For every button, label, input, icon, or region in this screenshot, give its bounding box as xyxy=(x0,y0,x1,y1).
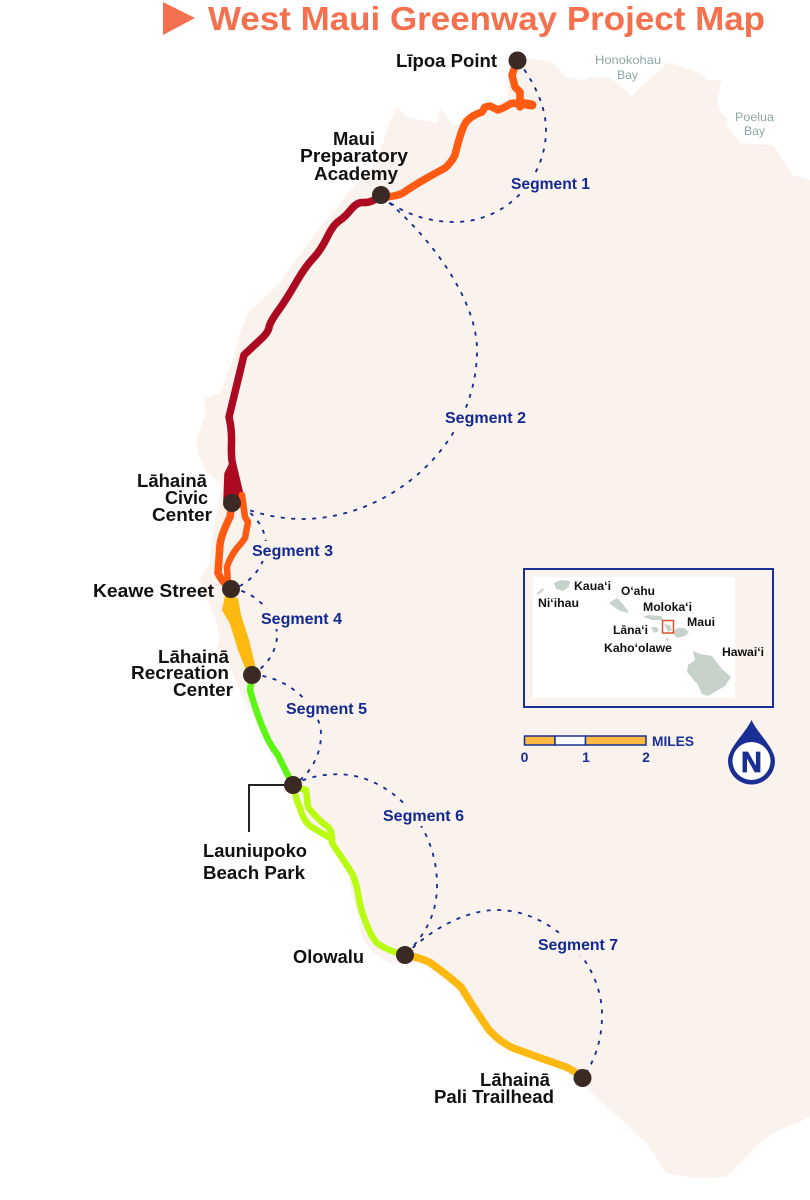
inset: Hawaiian Islands locator xyxy=(524,569,773,707)
place labels: Lāhainā xyxy=(480,1069,551,1090)
island labels: Lāna‘i xyxy=(613,623,648,637)
place labels: Beach Park xyxy=(203,862,306,883)
trail: segment 3 xyxy=(218,495,248,588)
bay labels: Honokohau xyxy=(595,53,661,67)
place labels: Keawe Street xyxy=(93,580,214,601)
scale bar: MILES xyxy=(652,734,694,749)
trail: segment 4 xyxy=(222,596,257,673)
place labels: Center xyxy=(173,679,233,700)
scale bar: 2 xyxy=(642,749,650,765)
locator box xyxy=(662,620,674,633)
island labels xyxy=(538,579,764,659)
island labels: Maui xyxy=(687,615,715,629)
scale bar: 0 xyxy=(521,749,529,765)
bay labels xyxy=(595,53,774,138)
icon: north arrow: N xyxy=(741,747,762,779)
segment labels xyxy=(249,174,621,955)
island labels: Kaua‘i xyxy=(574,579,611,593)
trail: segment 5 xyxy=(250,675,293,785)
title text: West Maui Greenway Project Map xyxy=(208,0,765,37)
segment brackets: dashed arcs xyxy=(231,61,602,1078)
place labels: Center xyxy=(152,504,212,525)
place labels: Civic xyxy=(165,487,208,508)
trail: segment 6 xyxy=(293,785,405,955)
segment labels: Segment 7 xyxy=(538,937,618,954)
islands xyxy=(537,580,731,696)
segment labels: Segment 1 xyxy=(511,176,590,193)
place labels: Līpoa Point xyxy=(396,50,497,71)
icon: title triangle xyxy=(163,2,195,35)
place labels: Maui xyxy=(333,128,375,149)
island labels: Moloka‘i xyxy=(643,600,692,614)
scale bar xyxy=(521,734,694,765)
title xyxy=(163,0,765,37)
place labels: Academy xyxy=(314,163,399,184)
segment labels: Segment 4 xyxy=(261,611,342,628)
icon: north arrow xyxy=(728,720,775,784)
trailhead markers xyxy=(222,52,592,1087)
place labels: Pali Trailhead xyxy=(434,1086,554,1107)
place labels: Launiupoko xyxy=(203,840,307,861)
trail: segment 1 xyxy=(382,61,532,197)
segment labels: Segment 2 xyxy=(445,410,526,427)
bay labels: Bay xyxy=(617,68,638,82)
segment labels: Segment 3 xyxy=(252,543,333,560)
segment labels: Segment 5 xyxy=(286,701,367,718)
trail: segment 7 xyxy=(405,955,582,1078)
place labels: Lāhainā xyxy=(158,646,230,667)
bay labels: Bay xyxy=(744,124,765,138)
segment labels: Segment 6 xyxy=(383,808,464,825)
scale bar: 1 xyxy=(582,749,590,765)
place labels: Olowalu xyxy=(293,946,364,967)
island labels: O‘ahu xyxy=(621,584,655,598)
island labels: Ni‘ihau xyxy=(538,596,579,610)
trail: segment 2 xyxy=(227,196,381,500)
bay labels: Poelua xyxy=(735,110,774,124)
place labels: Preparatory xyxy=(300,145,409,166)
place labels: Lāhainā xyxy=(137,470,208,491)
island labels: Kaho‘olawe xyxy=(604,641,672,655)
place labels xyxy=(93,50,554,1107)
place labels: Recreation xyxy=(131,662,229,683)
leader line: Launiupoko xyxy=(249,785,293,832)
island labels: Hawai‘i xyxy=(722,645,764,659)
land: West Maui xyxy=(196,58,810,1178)
